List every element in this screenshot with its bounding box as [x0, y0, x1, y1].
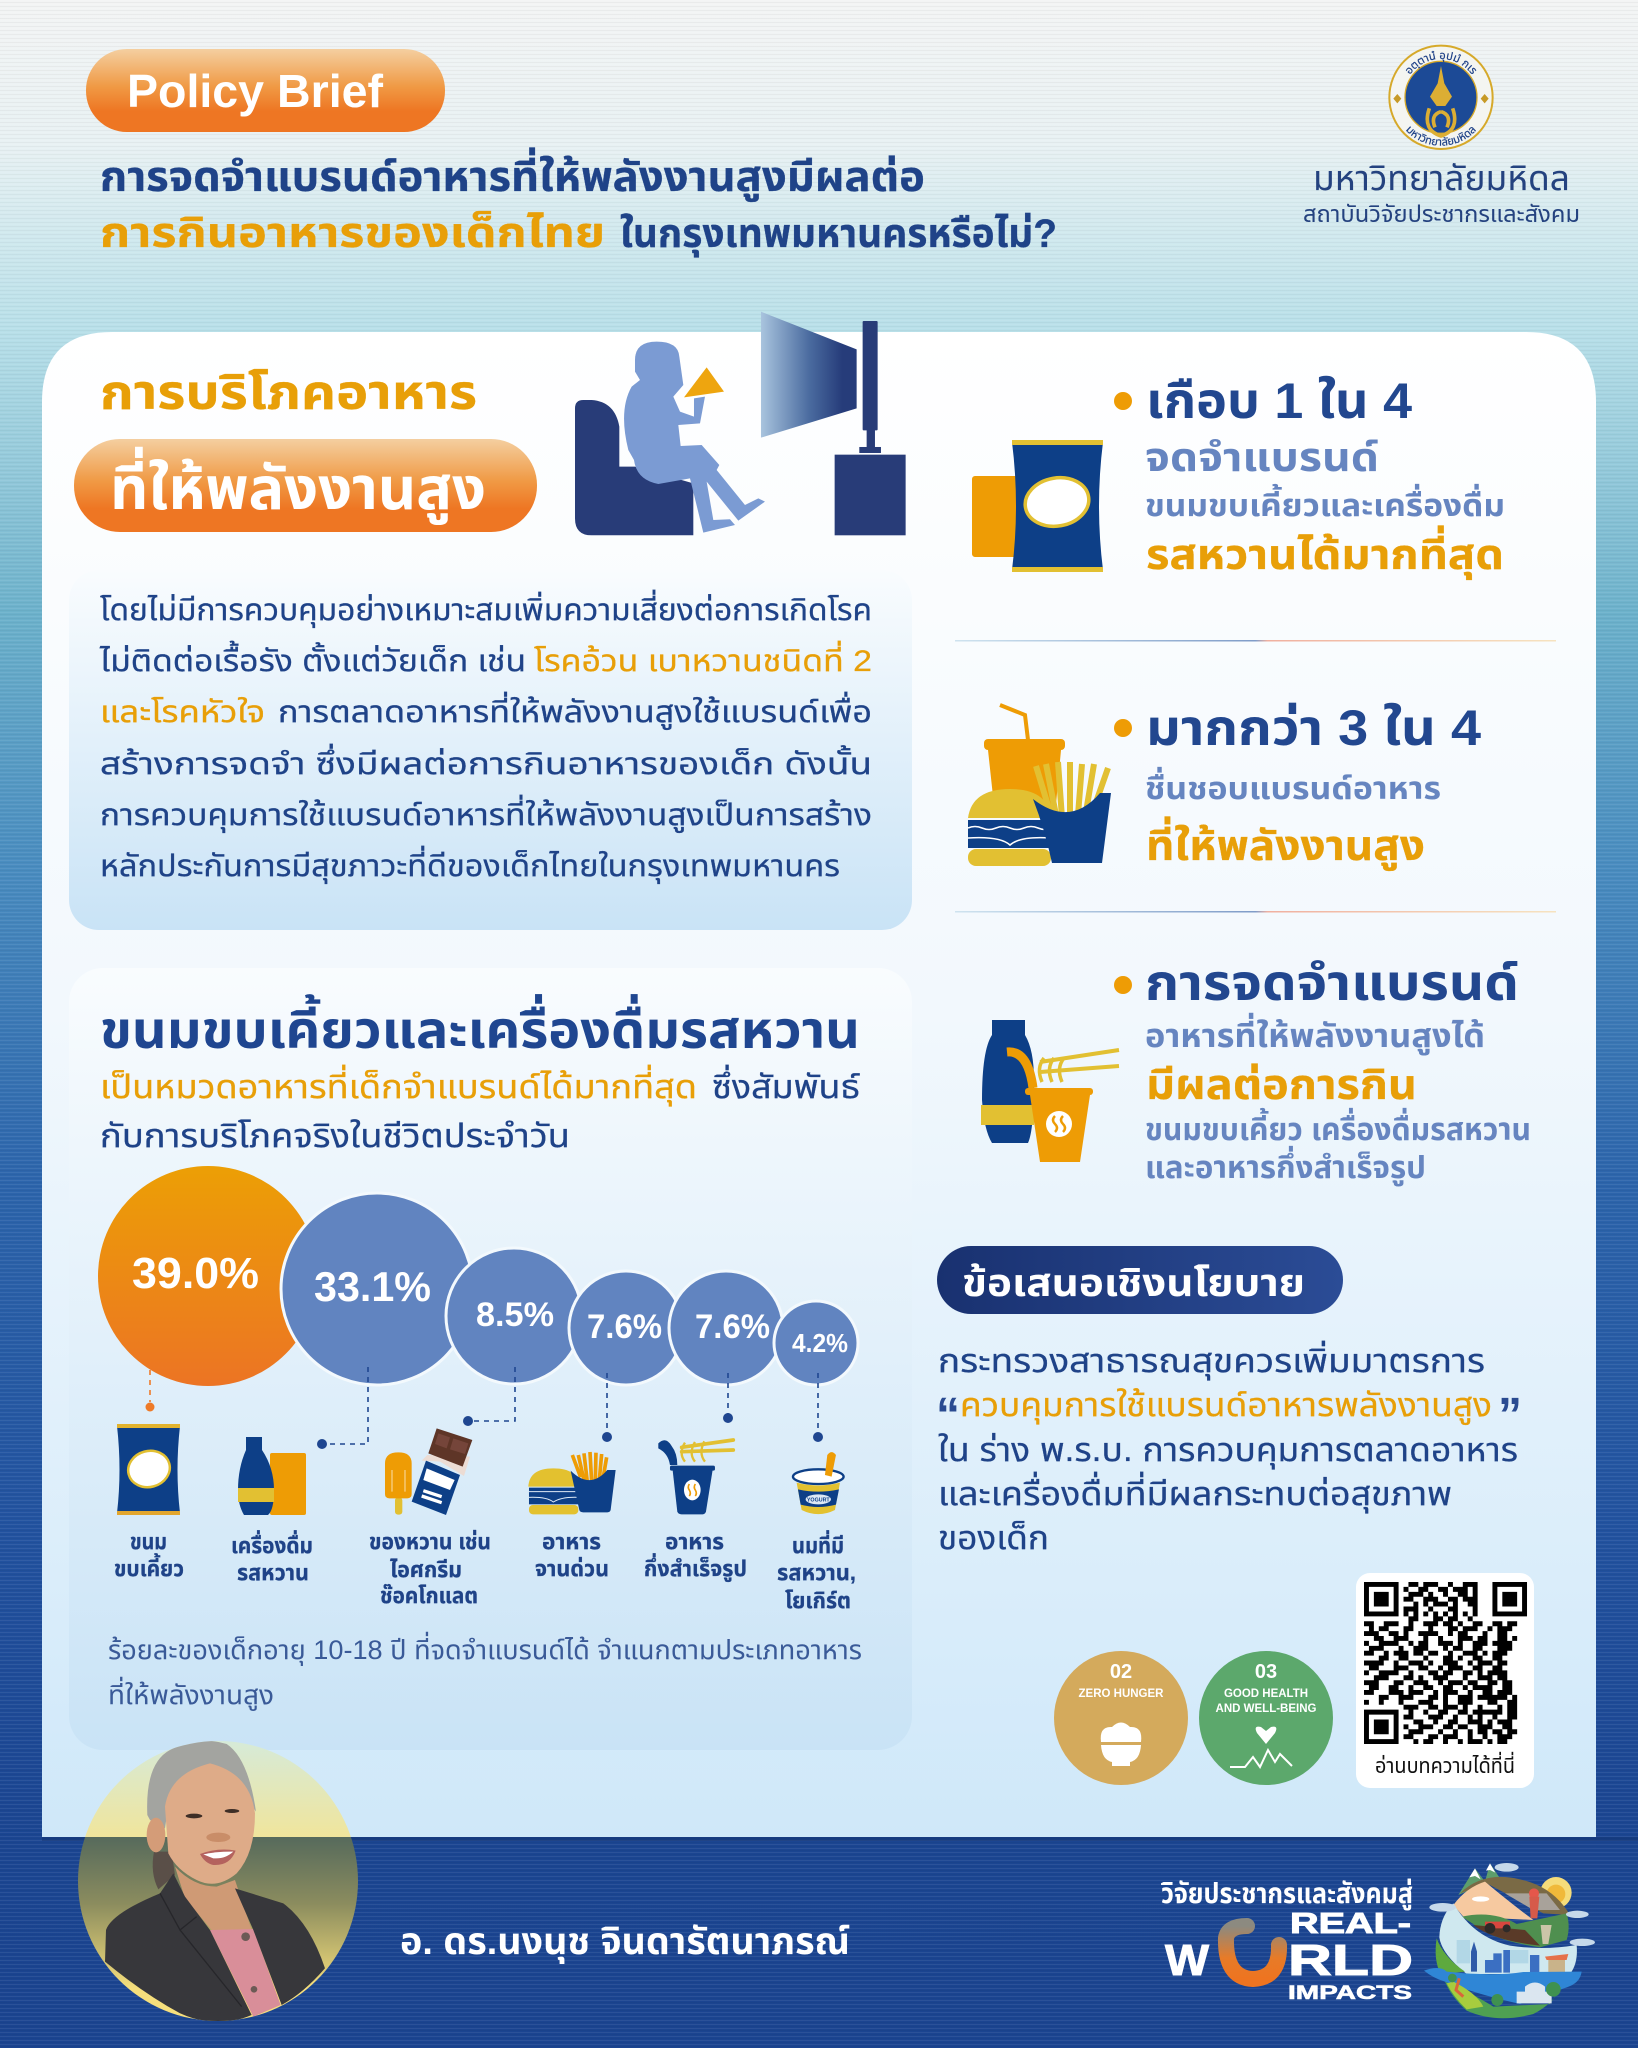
footer logo: Real-World Impacts: REAL- — [1290, 1908, 1411, 1940]
bubble chart — [98, 1166, 858, 1386]
policy text — [936, 1340, 1522, 1556]
QR code card: อ่านบทความได้ที่นี่ — [1375, 1751, 1515, 1778]
footer logo: Real-World Impacts: W — [1165, 1936, 1209, 1985]
policy heading — [937, 1246, 1343, 1314]
bubble chart: 7.6% — [587, 1308, 662, 1346]
chart category labels: ของหวาน เช่น — [369, 1529, 491, 1554]
footer logo: Real-World Impacts: วิจัยประชากรและสังคมสู่ — [1160, 1878, 1413, 1911]
heading: high energy food consumption: การบริโภคอาหาร — [100, 367, 477, 420]
stat: nearly 1 in 4: ขนมขบเคี้ยวและเครื่องดื่ม — [1145, 483, 1505, 523]
chart category labels: กึ่งสำเร็จรูป — [644, 1553, 747, 1582]
chart heading: เป็นหมวดอาหารที่เด็กจำแบรนด์ได้มากที่สุด — [100, 1064, 697, 1107]
policy text: ” — [1498, 1389, 1522, 1442]
logo: Mahidol University seal — [1388, 44, 1494, 150]
logo: Mahidol University seal: มหาวิทยาลัยมหิดล — [1406, 126, 1476, 146]
stat: nearly 1 in 4: จดจำแบรนด์ — [1145, 436, 1379, 480]
chart heading: ซึ่งสัมพันธ์ — [712, 1064, 861, 1105]
chart heading: ขนมขบเคี้ยวและเครื่องดื่มรสหวาน — [100, 994, 860, 1060]
text block: introduction: สร้างการจดจำ ซึ่งมีผลต่อการกินอาหารของเด็ก ดังนั้น — [100, 743, 872, 781]
icon: yogurt: YOGURT — [807, 1497, 830, 1503]
stat: more than 3 in 4: ชื่นชอบแบรนด์อาหาร — [1145, 766, 1441, 806]
policy text: ควบคุมการใช้แบรนด์อาหารพลังงานสูง — [960, 1386, 1492, 1425]
policy text: และเครื่องดื่มที่มีผลกระทบต่อสุขภาพ — [938, 1471, 1452, 1514]
text block: introduction: ไม่ติดต่อเรื้อรัง ตั้งแต่วัยเด็ก เช่น — [99, 640, 526, 678]
organisation name — [1303, 159, 1580, 227]
footer logo: Real-World Impacts: RLD — [1288, 1936, 1413, 1985]
chart category labels: อาหาร — [542, 1529, 601, 1554]
chart category labels: นมที่มี — [792, 1530, 844, 1558]
chart heading — [100, 994, 861, 1154]
chart category labels: จานด่วน — [535, 1556, 609, 1581]
heading: high energy food consumption — [74, 367, 537, 532]
SDG badge: zero hunger — [1054, 1651, 1188, 1785]
icon: fast food — [528, 1452, 616, 1514]
presenter name: อ. ดร.นงนุช จินดารัตนาภรณ์ — [400, 1921, 850, 1964]
title — [100, 147, 1057, 258]
main panel — [42, 332, 1596, 1837]
title: การจดจำแบรนด์อาหารที่ให้พลังงานสูงมีผลต่อ — [100, 147, 925, 202]
chart category labels: โยเกิร์ต — [785, 1588, 851, 1613]
divider — [955, 640, 1556, 642]
policy text: ของเด็ก — [938, 1519, 1049, 1556]
icon: instant noodles — [658, 1440, 733, 1514]
SDG badge: good health and well-being — [1199, 1651, 1333, 1785]
bubble chart: 8.5% — [476, 1296, 554, 1334]
stat: brand recognition affects eating: ขนมขบเคี้ยว เครื่องดื่มรสหวาน — [1145, 1107, 1531, 1147]
illustration: child eating in front of TV — [575, 312, 906, 535]
stat: brand recognition affects eating: อาหารที่ให้พลังงานสูงได้ — [1145, 1012, 1485, 1056]
stat: brand recognition affects eating: และอาหารกึ่งสำเร็จรูป — [1145, 1145, 1426, 1186]
organisation name: สถาบันวิจัยประชากรและสังคม — [1303, 201, 1580, 227]
chart category labels: ขนม — [130, 1529, 167, 1554]
text block: introduction: โรคอ้วน เบาหวานชนิดที่ 2 — [534, 640, 872, 678]
icon: yogurt — [793, 1452, 844, 1514]
chart category labels: ขบเคี้ยว — [114, 1553, 184, 1581]
bubble chart: 4.2% — [792, 1328, 848, 1358]
policy text: “ — [936, 1389, 960, 1442]
portrait: researcher photo — [70, 1741, 370, 2027]
policy heading: ข้อเสนอเชิงนโยบาย — [962, 1263, 1305, 1305]
footer logo: Real-World Impacts — [1160, 1878, 1413, 2004]
chart category labels: รสหวาน, — [777, 1560, 856, 1585]
chart category labels: อาหาร — [665, 1529, 724, 1554]
icon: soft drink, burger and fries — [968, 705, 1111, 866]
connector lines — [146, 1367, 823, 1449]
stat: nearly 1 in 4: เกือบ 1 ใน 4 — [1146, 373, 1412, 429]
icon: snack bag — [117, 1424, 180, 1515]
chart category labels — [114, 1529, 856, 1613]
text block: introduction: การควบคุมการใช้แบรนด์อาหารที่ให้พลังงานสูงเป็นการสร้าง — [100, 794, 872, 833]
SDG badge: good health and well-being: 03 — [1255, 1661, 1277, 1683]
icon: ice cream and chocolate — [385, 1428, 472, 1515]
icon: sweet drinks — [238, 1437, 306, 1515]
text block: introduction: การตลาดอาหารที่ให้พลังงานสูงใช้แบรนด์เพื่อ — [278, 691, 872, 730]
title: การกินอาหารของเด็กไทย — [100, 209, 605, 256]
policy text: ใน ร่าง พ.ร.บ. การควบคุมการตลาดอาหาร — [938, 1431, 1518, 1470]
SDG badge: zero hunger: 02 — [1110, 1661, 1132, 1683]
stat: more than 3 in 4: มากกว่า 3 ใน 4 — [1146, 700, 1481, 756]
stat: nearly 1 in 4: รสหวานได้มากที่สุด — [1146, 525, 1504, 580]
stat: brand recognition affects eating — [1114, 955, 1531, 1186]
text block: introduction: โดยไม่มีการควบคุมอย่างเหมาะสมเพิ่มความเสี่ยงต่อการเกิดโรค — [100, 589, 872, 628]
SDG badge: good health and well-being: AND WELL-BEING — [1216, 1703, 1317, 1715]
chart category labels: รสหวาน — [237, 1560, 309, 1585]
policy text: กระทรวงสาธารณสุขควรเพิ่มมาตรการ — [938, 1340, 1485, 1381]
text block: introduction: และโรคหัวใจ — [100, 696, 265, 729]
bubble chart: 7.6% — [695, 1308, 770, 1346]
bubble chart: 39.0% — [132, 1249, 259, 1298]
SDG badge: good health and well-being: GOOD HEALTH — [1224, 1688, 1308, 1700]
badge: Policy Brief — [86, 49, 445, 132]
organisation name: มหาวิทยาลัยมหิดล — [1313, 159, 1570, 198]
QR code card — [1356, 1573, 1534, 1788]
footer logo: Real-World Impacts: IMPACTS — [1288, 1983, 1412, 2004]
icon: can and snack bag — [972, 440, 1103, 572]
stat: more than 3 in 4: ที่ให้พลังงานสูง — [1146, 816, 1425, 871]
text block: introduction — [69, 570, 912, 930]
chart caption: ร้อยละของเด็กอายุ 10-18 ปี ที่จดจำแบรนด์ได้ จำแนกตามประเภทอาหาร — [108, 1631, 862, 1666]
divider — [955, 911, 1556, 912]
stat: brand recognition affects eating: มีผลต่อการกิน — [1146, 1061, 1417, 1108]
stat: brand recognition affects eating: การจดจำแบรนด์ — [1145, 955, 1519, 1011]
logo: Mahidol University seal: อตฺตานํ อุปมํ กเร — [1406, 50, 1476, 74]
chart category labels: ช๊อคโกแลต — [380, 1583, 478, 1608]
stat: more than 3 in 4 — [1114, 700, 1481, 871]
bubble chart: 33.1% — [314, 1263, 431, 1310]
chart category labels: เครื่องดื่ม — [231, 1530, 313, 1558]
title: ในกรุงเทพมหานครหรือไม่? — [620, 211, 1057, 258]
chart caption: ที่ให้พลังงานสูง — [108, 1676, 274, 1711]
icon: bottle and instant noodle cup — [981, 1020, 1119, 1162]
heading: high energy food consumption: ที่ให้พลังงานสูง — [110, 446, 486, 525]
badge: Policy Brief: Policy Brief — [127, 65, 384, 117]
footer illustration: globe of society — [1424, 1863, 1595, 2018]
chart heading: กับการบริโภคจริงในชีวิตประจำวัน — [100, 1117, 570, 1154]
chart caption — [108, 1631, 862, 1711]
panel: snack and sweet drink chart — [69, 968, 912, 1750]
SDG badge: zero hunger: ZERO HUNGER — [1079, 1688, 1164, 1700]
chart category labels: ไอศกรีม — [390, 1557, 462, 1582]
stat: nearly 1 in 4 — [1114, 373, 1505, 580]
text block: introduction: หลักประกันการมีสุขภาวะที่ดีของเด็กไทยในกรุงเทพมหานคร — [100, 845, 840, 884]
